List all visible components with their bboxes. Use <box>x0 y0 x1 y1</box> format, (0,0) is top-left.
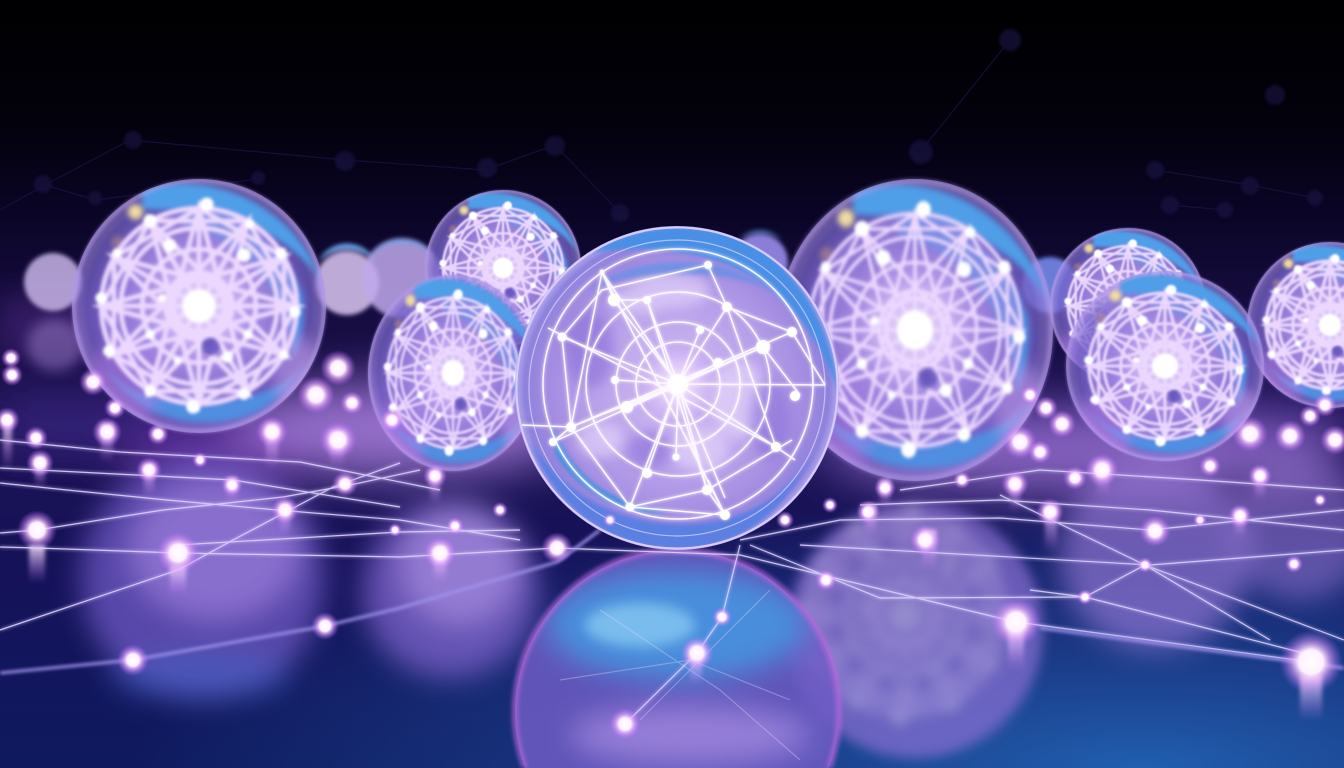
orb: back left 2 <box>362 238 442 318</box>
sphere reflections on the floor <box>81 456 1344 768</box>
streaks <box>3 420 1322 721</box>
main orb web <box>522 249 825 520</box>
interior light blobs <box>576 272 768 472</box>
orb: back left 1 <box>315 244 379 315</box>
orb: back centre right <box>732 230 788 290</box>
orb: upper centre left <box>425 190 581 346</box>
small nodes <box>0 348 1344 556</box>
main central glass orb <box>515 226 840 550</box>
floor glow <box>0 382 1344 495</box>
reflection: far right orb <box>1060 460 1344 650</box>
reflection: left orb <box>81 456 325 700</box>
floor network lines <box>0 440 1344 724</box>
orb: far left <box>24 253 83 371</box>
orb: large right <box>777 179 1053 481</box>
reflection: main orb <box>515 550 839 768</box>
glowing floor nodes with streak reflections <box>0 348 1344 740</box>
faint background network <box>0 29 1323 222</box>
orb: large left <box>72 179 326 433</box>
back row small orbs <box>24 230 1078 371</box>
thick floor strands <box>0 530 1344 673</box>
lower blue crescent <box>530 440 815 550</box>
centre burst <box>632 338 724 430</box>
orb: mid left front <box>368 275 538 471</box>
orb: upper right <box>1050 228 1206 384</box>
large nodes <box>17 510 1343 740</box>
upper inner band <box>590 262 770 290</box>
orb: back right small <box>1022 257 1078 313</box>
orb: far right <box>1247 242 1344 408</box>
reflection: right orb <box>787 502 1043 758</box>
orb: mid right front <box>1066 271 1264 461</box>
reflection: small left orb <box>362 502 538 678</box>
top blue highlight <box>590 227 840 400</box>
